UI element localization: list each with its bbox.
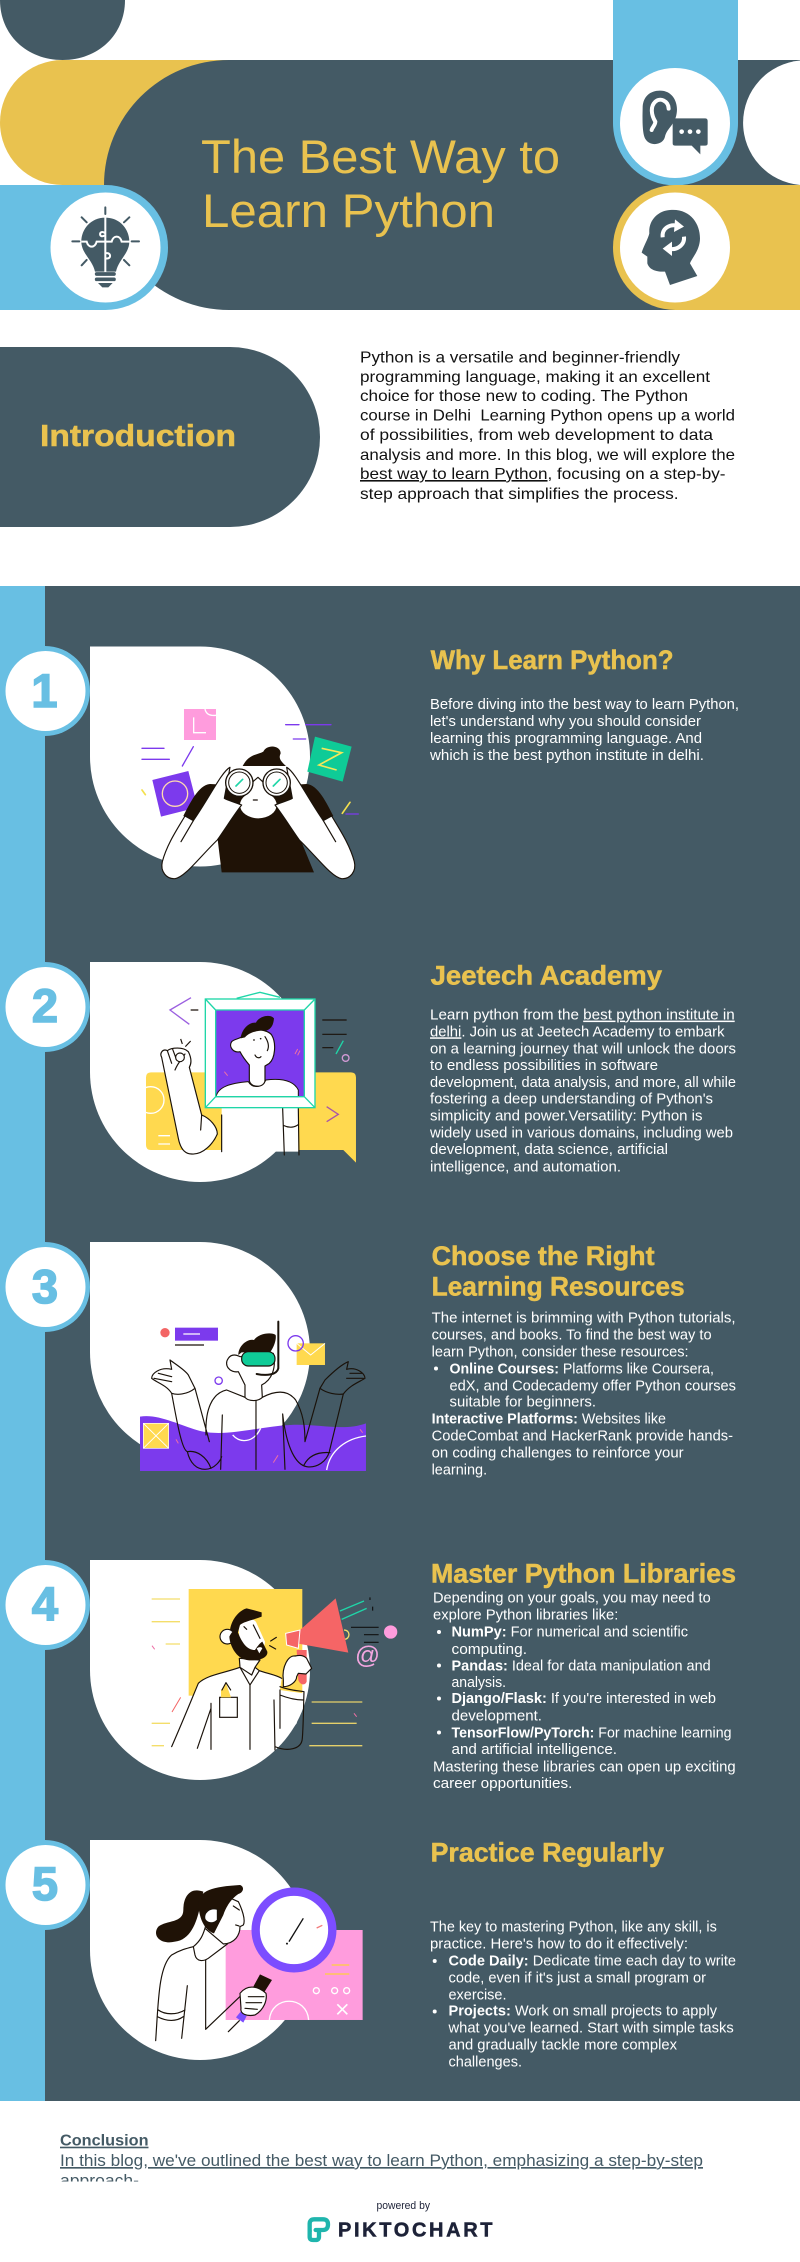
yellow tab with head icon [613,185,800,310]
title: The Best Way to [201,130,560,183]
body text 5: Code Daily: Dedicate time each day to write [448,1953,736,1970]
introduction text: programming language, making it an excellent [360,369,711,386]
illustration: man with megaphone [152,1589,397,1750]
illustration: person in a frame [137,992,356,1163]
title [201,130,560,237]
body text 2 [429,1007,736,1175]
conclusion [60,2134,703,2182]
step 4 [0,1559,736,1792]
introduction text: choice for those new to coding. The Python [360,388,688,405]
body text 4: development. [452,1708,542,1724]
number badge 4: 4 [32,1577,58,1630]
body text 3: CodeCombat and HackerRank provide hands- [432,1427,733,1444]
introduction text: of possibilities, from web development to data [360,427,713,444]
body text 4 [433,1590,736,1792]
step 2 [0,960,736,1182]
body text 4: computing. [452,1641,527,1658]
illustration: person with binoculars [142,709,358,879]
body text 2: simplicity and power.Versatility: Python is [430,1107,702,1124]
body text 1 [429,696,739,764]
white teardrop 1 [90,646,310,866]
conclusion: Conclusion [60,2133,148,2150]
body text 5: Projects: Work on small projects to apply [448,2003,717,2020]
body text 5: what you've learned. Start with simple tasks [448,2020,734,2037]
introduction text: Python is a versatile and beginner-friendly [360,350,680,366]
number badge 5 [0,1840,90,1930]
white teardrop 3 [90,1242,310,1462]
white teardrop 4 [90,1560,310,1780]
body text 1: Before diving into the best way to learn Python, [430,696,739,713]
number badge 1: 1 [31,664,58,717]
conclusion: approach- [60,2172,139,2190]
body text 5: code, even if it's just a small program or [448,1970,706,1987]
body text 3: Interactive Platforms: Websites like [432,1410,666,1428]
step 1 [0,645,739,879]
introduction text: step approach that simplifies the process. [360,486,679,503]
body text 2: widely used in various domains, including web [429,1124,733,1142]
step 5 [0,1838,736,2071]
body text 2: fostering a deep understanding of Python's [430,1091,713,1108]
body text 3: on coding challenges to reinforce your [432,1445,684,1462]
illustration: woman with magnifying glass [156,1885,363,2041]
white teardrop 5 [90,1840,310,2060]
body text 5: and gradually tackle more complex [448,2037,677,2054]
right white semicircle [743,60,800,185]
body text 3: learn Python, consider these resources: [432,1344,689,1360]
body text 3: The internet is brimming with Python tutorials, [432,1310,736,1326]
number badge 2 [0,962,90,1052]
illustration: man with megaphone: @ [355,1642,380,1669]
body text 4: career opportunities. [433,1775,572,1792]
body text 4: Mastering these libraries can open up exciting [433,1758,736,1775]
icon: Piktochart logo mark [310,2219,328,2240]
body text 2: development, data science, artificial [430,1141,668,1158]
body text 3: courses, and books. To find the best way to [432,1327,712,1344]
body text 5 [430,1919,736,2071]
illustration: snorkel person [140,1322,366,1471]
body text 3: suitable for beginners. [450,1394,596,1411]
body text 3: edX, and Codecademy offer Python courses [450,1378,736,1395]
title: Learn Python [202,184,495,237]
top-left dark semicircle [0,0,125,60]
introduction text [360,350,735,503]
body text 3: learning. [432,1461,487,1478]
body text 4: NumPy: For numerical and scientific [452,1624,688,1641]
body text 2: intelligence, and automation. [430,1158,621,1175]
number badge 3 [0,1242,90,1332]
blue tab with puzzle bulb icon [0,185,168,310]
number badge 1 [0,646,90,736]
white teardrop 2 [90,962,310,1182]
introduction pill [0,347,320,527]
blue tab with ear icon [613,0,738,186]
body text 4: TensorFlow/PyTorch: For machine learning [452,1724,732,1741]
body text 2: delhi. Join us at Jeetech Academy to embark [430,1023,725,1040]
body text 4: Django/Flask: If you're interested in web [452,1690,716,1707]
body text 3: Online Courses: Platforms like Coursera, [450,1361,714,1378]
body text 5: challenges. [448,2054,522,2071]
dark header band [104,60,800,310]
heading 3: Choose the Right [432,1241,655,1271]
body text 2: to endless possibilities in software [430,1057,658,1074]
body text 4: Pandas: Ideal for data manipulation and [452,1657,711,1674]
number badge 4 [0,1560,90,1650]
body text 2: on a learning journey that will unlock the doors [430,1040,736,1058]
powered by Piktochart footer: powered by [376,2200,430,2212]
conclusion: In this blog, we've outlined the best way to learn Python, emphasizing a step-by-step [60,2152,703,2170]
introduction pill: Introduction [40,418,236,453]
body text 1: let's understand why you should consider [430,713,701,730]
number badge 3: 3 [32,1260,58,1313]
body text 4: explore Python libraries like: [433,1606,618,1623]
steps panel background [0,586,800,2101]
body text 3 [432,1310,736,1478]
body text 4: analysis. [452,1674,506,1691]
introduction text: course in Delhi Learning Python opens up a world [360,408,735,425]
body text 4: and artificial intelligence. [452,1741,617,1758]
heading 1: Why Learn Python? [431,645,674,675]
number badge 5: 5 [32,1857,58,1910]
body text 2: development, data analysis, and more, all while [430,1074,736,1091]
powered by Piktochart footer: PIKTOCHART [338,2220,492,2242]
header banner [0,0,800,310]
yellow left pill [0,60,240,185]
body text 2: Learn python from the best python institute in [430,1007,735,1024]
introduction text: analysis and more. In this blog, we will explore the [360,447,735,464]
number badge 2: 2 [32,979,58,1032]
heading 5: Practice Regularly [431,1838,664,1868]
step 3 [0,1241,736,1478]
body text 5: exercise. [448,1986,506,2003]
body text 4: Depending on your goals, you may need to [433,1590,711,1607]
body text 1: learning this programming language. And [430,730,702,747]
body text 5: The key to mastering Python, like any skill, is [430,1919,717,1936]
heading 2: Jeetech Academy [431,960,662,990]
heading 3: Learning Resources [432,1272,685,1302]
heading 4: Master Python Libraries [431,1559,736,1589]
heading 3 [432,1241,685,1302]
introduction text: best way to learn Python , focusing on a step-by- [360,466,726,483]
body text 1: which is the best python institute in delhi. [429,747,704,764]
powered by Piktochart footer [310,2200,492,2242]
body text 5: practice. Here's how to do it effectively: [430,1936,688,1953]
